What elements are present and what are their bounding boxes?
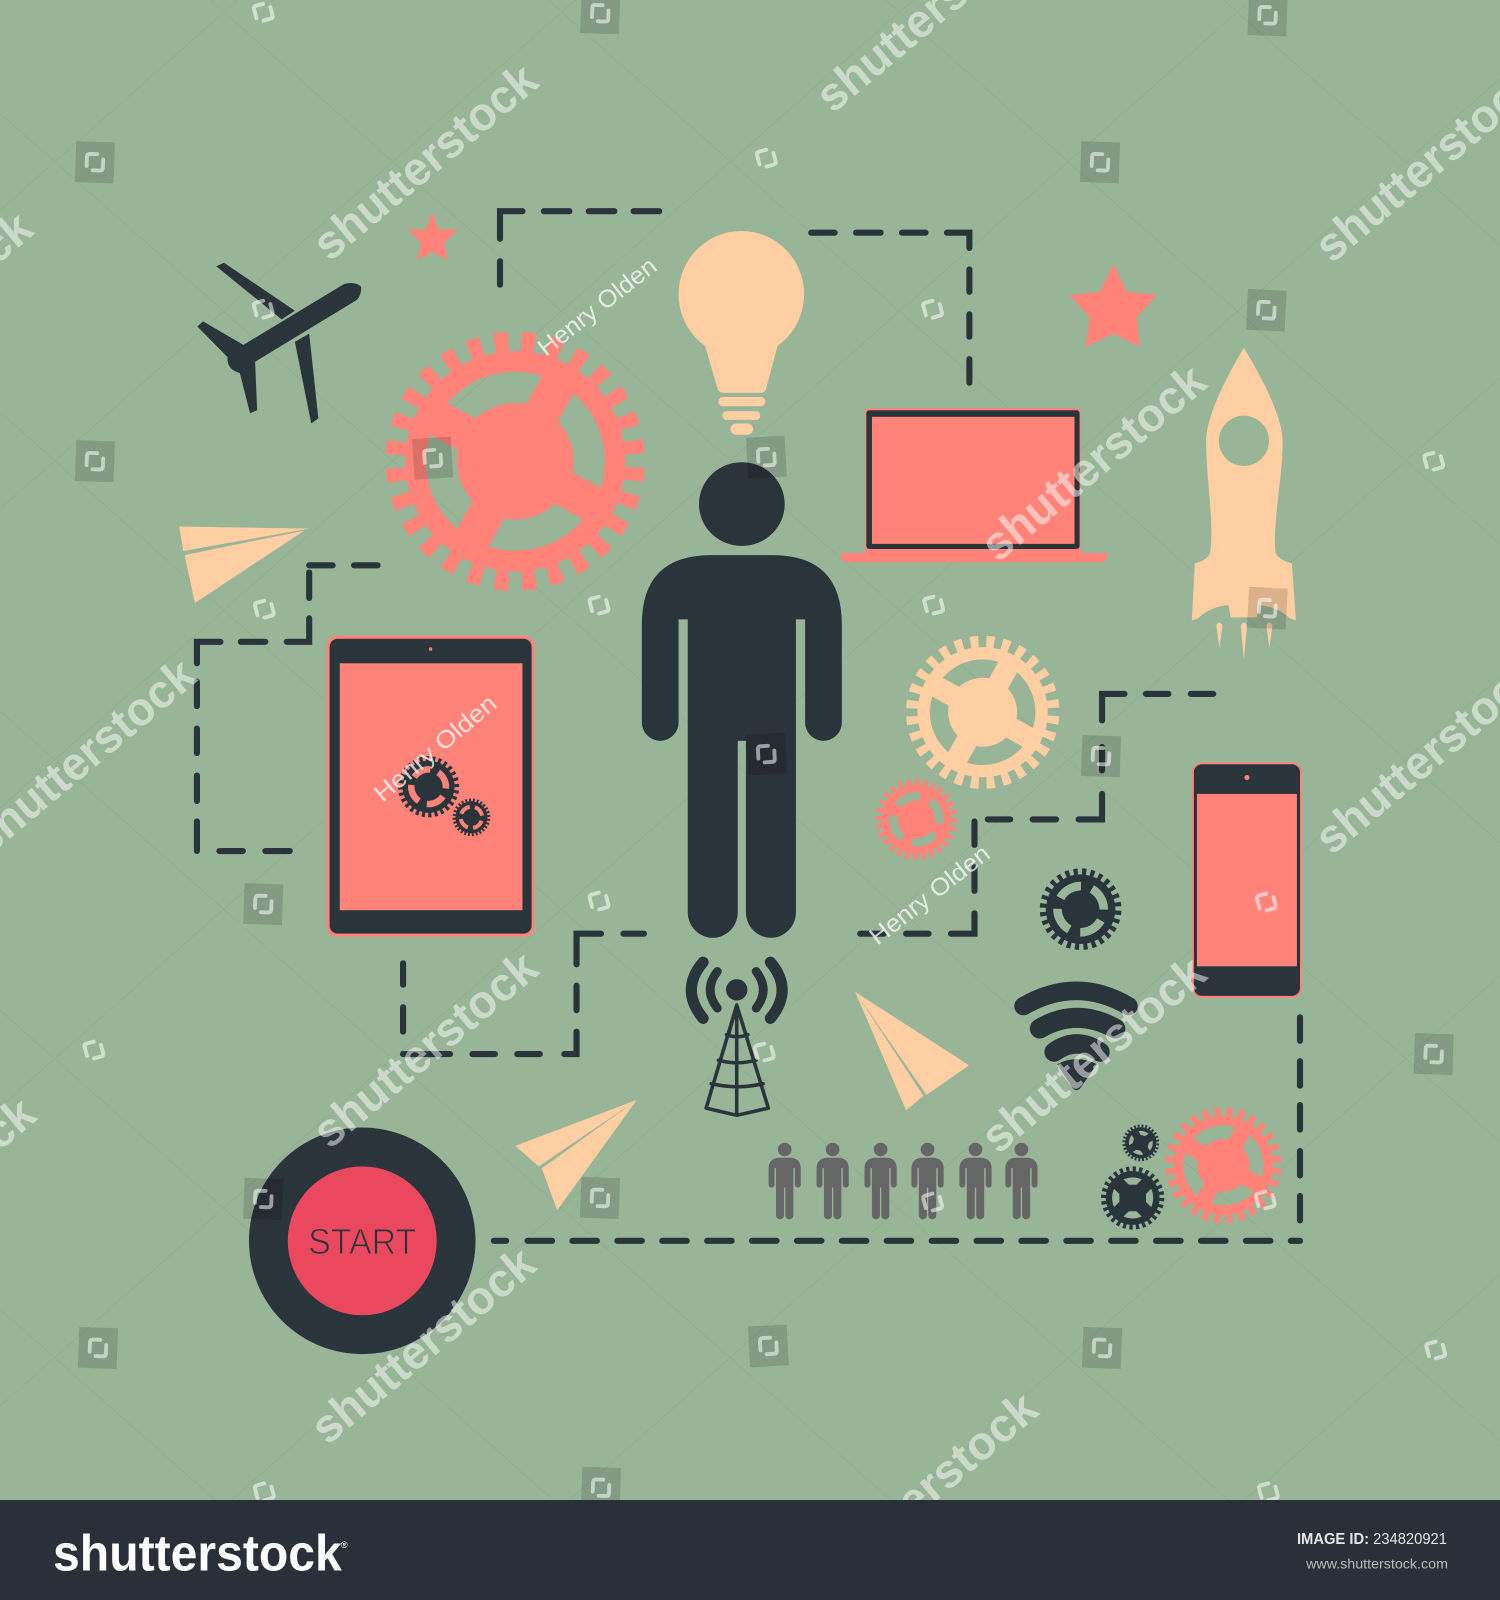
icon: dark gear (1035, 863, 1127, 955)
icon: large red gear (353, 299, 677, 623)
icon: tablet large gear (392, 751, 465, 823)
icon: paper plane top left (179, 527, 309, 603)
icon: tablet small gear (453, 799, 490, 836)
start button: START (308, 1222, 416, 1262)
watermark: shutterstock text: shutterstock (971, 353, 1216, 571)
dashed path: star to bulb top left (500, 211, 659, 285)
start button (249, 1128, 476, 1354)
icon: rocket (1192, 348, 1296, 660)
watermark: author name: Henry Olden (369, 690, 502, 808)
dashed path: person to tablet (403, 934, 644, 1054)
icon: wifi signal (1023, 991, 1129, 1090)
icon: laptop (840, 408, 1108, 562)
dashed path: phone to gears (860, 694, 1213, 934)
footer bar (0, 1500, 1500, 1600)
icon: radio tower (691, 962, 782, 1115)
icon: tablet (327, 636, 535, 937)
icon: large star (1069, 264, 1157, 347)
watermark: author name: Henry Olden (865, 840, 995, 951)
dashed path: bulb to laptop (811, 233, 969, 383)
footer image id: IMAGE ID: 234820921 (1297, 1531, 1447, 1548)
watermark: shutterstock text: shutterstock (303, 52, 548, 270)
icon: light bulb (679, 231, 804, 435)
watermark: author name (369, 253, 995, 951)
icon: bottom dark gear (1100, 1166, 1165, 1230)
icon: bottom red gear (1151, 1093, 1296, 1238)
icon: row of people (769, 1143, 1038, 1219)
icon: small red gear (867, 770, 966, 869)
icon: airplane (197, 263, 361, 423)
footer logo: shutterstock (53, 1524, 342, 1581)
icon: small star (407, 212, 458, 260)
watermark: shutterstock text: shutterstock (303, 940, 548, 1158)
dashed path: start to phone (494, 1017, 1300, 1241)
icon: person (642, 462, 842, 938)
icon: paper plane center (855, 992, 969, 1110)
watermark: shutterstock text: erstock (886, 1381, 1048, 1528)
watermark: shutterstock text: shutterstock (971, 945, 1216, 1163)
watermark: shutterstock text: shutterstock (301, 1236, 546, 1454)
icon: bottom small dark gear (1118, 1120, 1164, 1166)
watermark: author name: Henry Olden (533, 253, 662, 362)
icon: paper plane bottom (515, 1100, 637, 1210)
footer website: www.shutterstock.com (1305, 1556, 1448, 1572)
dashed path: tablet to paper plane (197, 565, 378, 851)
icon: smartphone (1192, 762, 1302, 998)
icon: cream gear (887, 617, 1078, 808)
footer registered mark: ® (341, 1540, 348, 1550)
